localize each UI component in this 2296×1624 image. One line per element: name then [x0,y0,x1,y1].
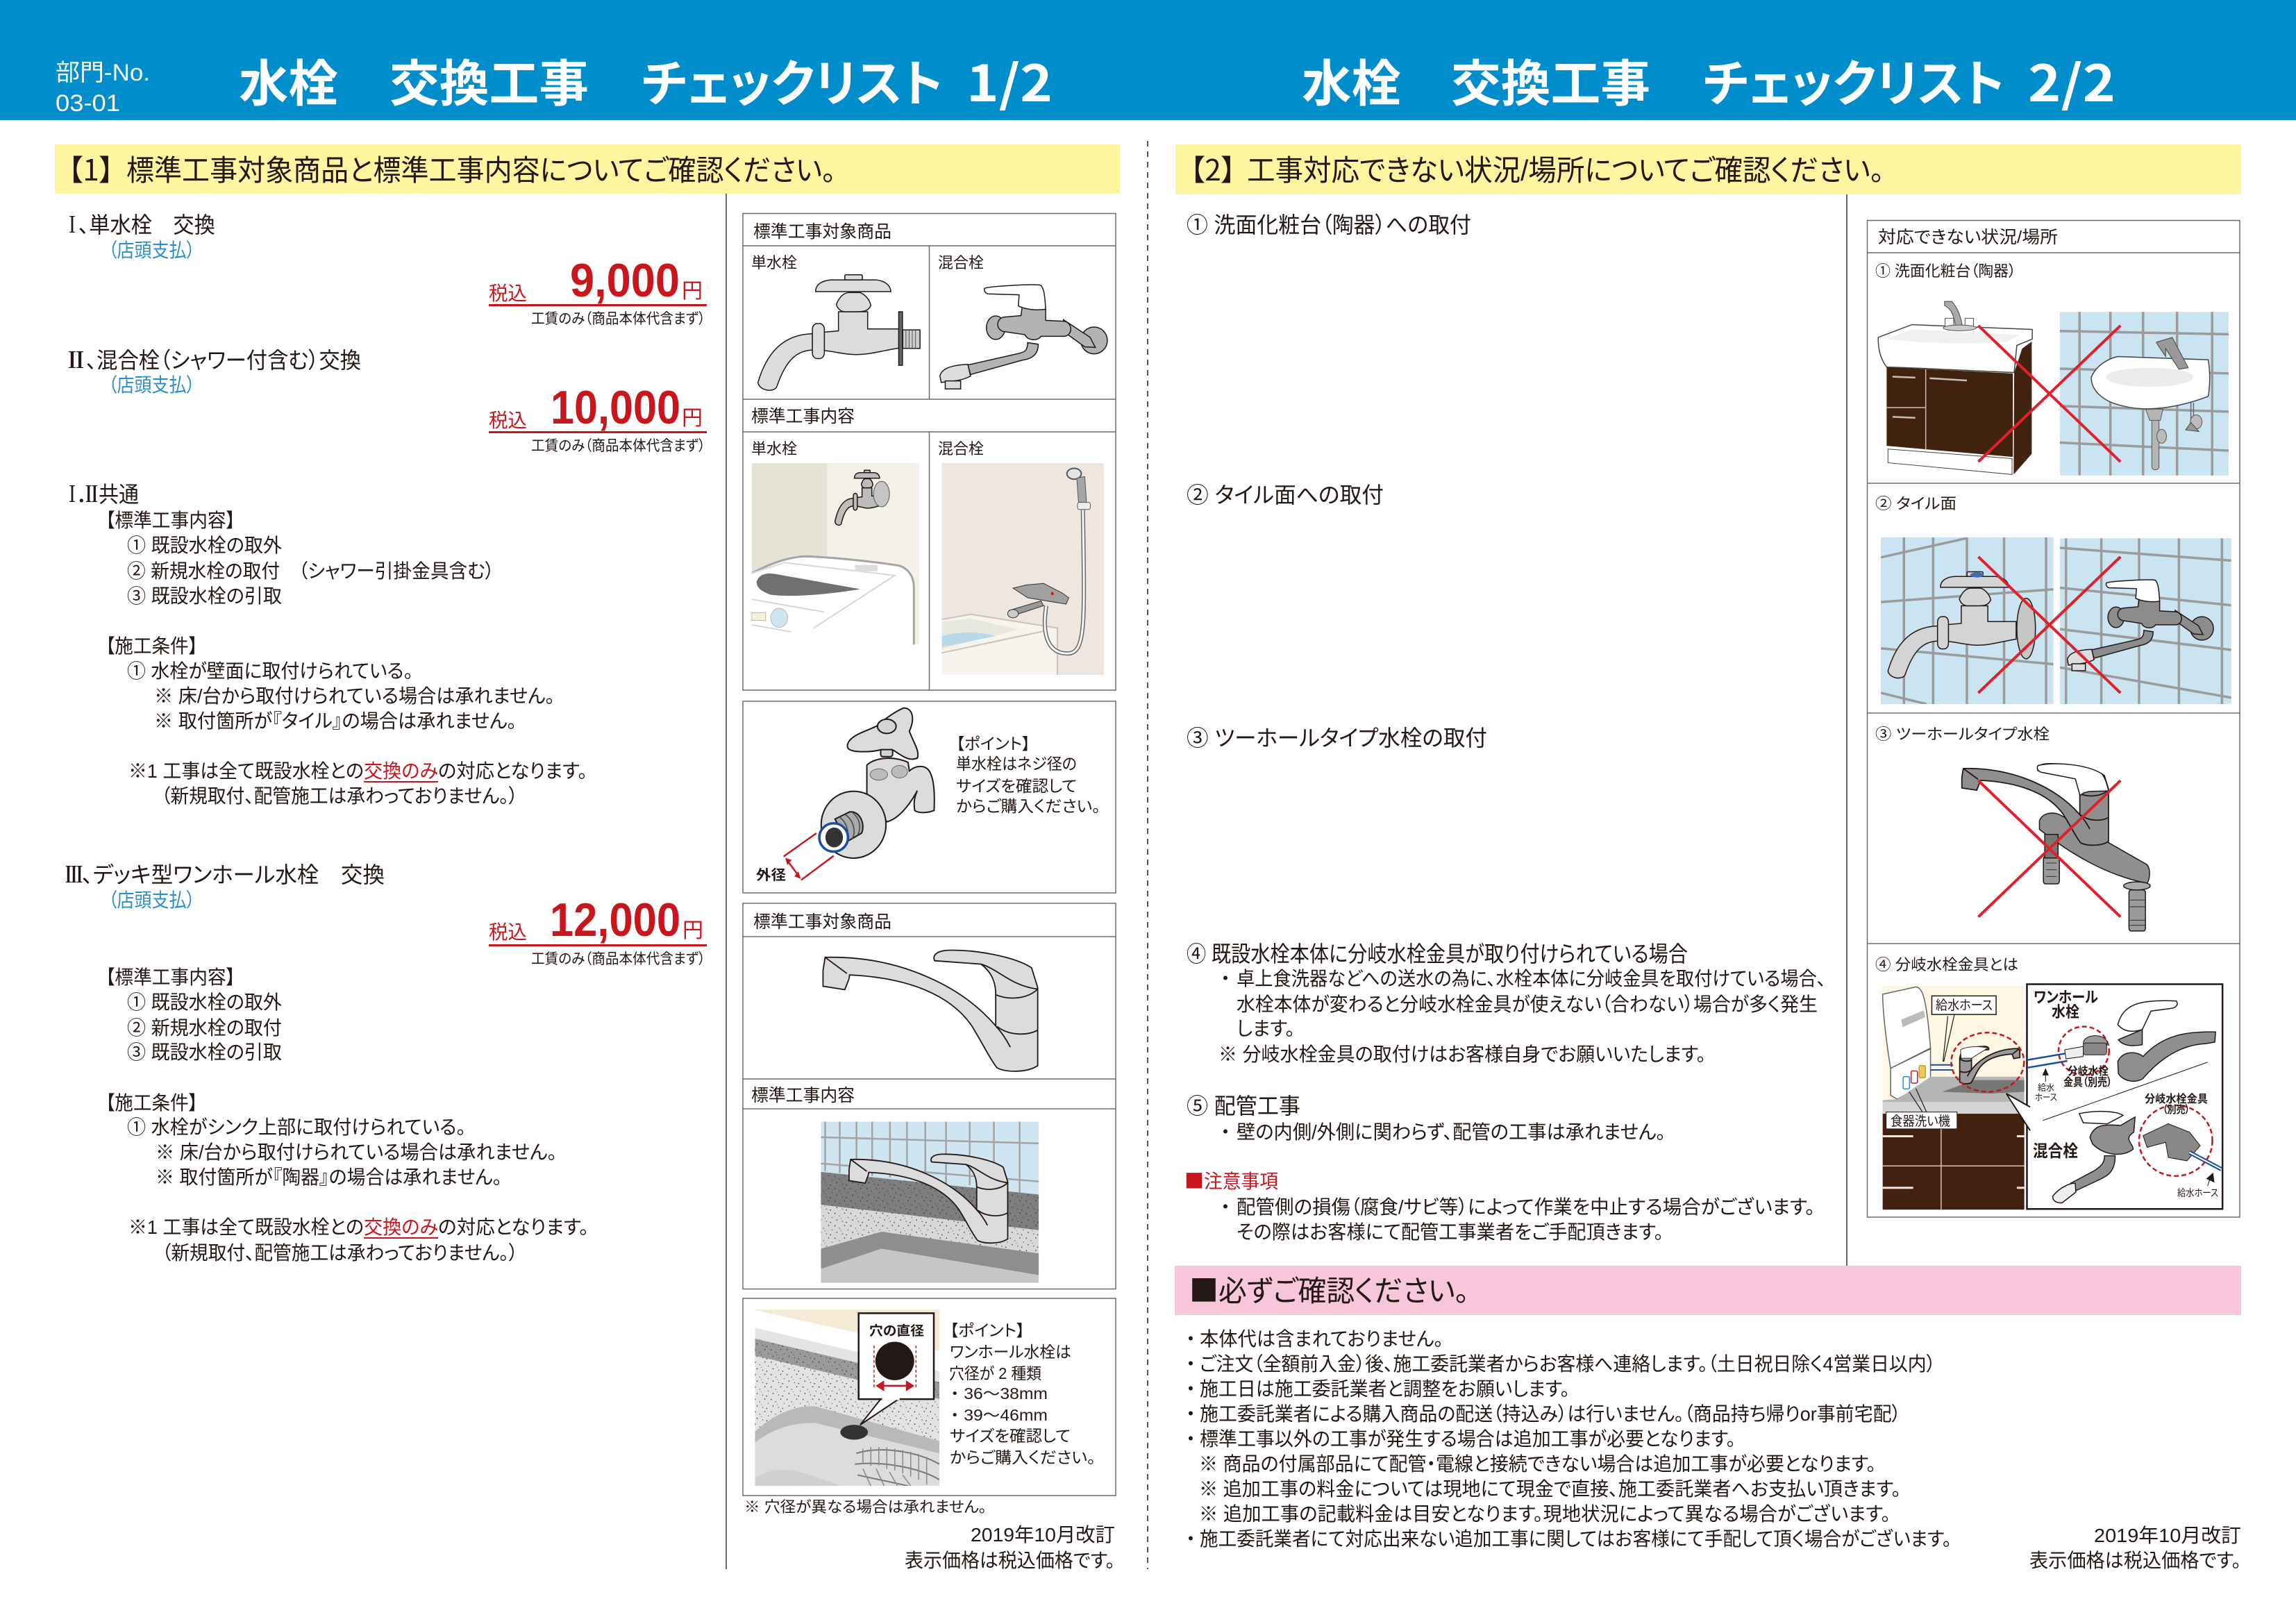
panel: price II mixer faucet: 円 [682,407,703,430]
title: checklist 2/2: チェックリスト [1703,57,2004,112]
point text: 単水栓はネジ径の [956,755,1077,773]
text block: III conditions: ※ 床/台から取付けられている場合は承れません。 [156,1141,557,1163]
panel: target products and work content (single and mixer): 混合栓 [938,254,984,271]
point text: ・ 36～38mm [950,1384,1048,1403]
text block: I II common conditions: の対応となります。 [438,760,587,782]
text block: confirmation list: ・ [1186,1428,1196,1450]
panel: situations that cannot be handled: ④ 分岐水栓金具とは [1875,956,2018,973]
section heading: please confirm [1175,1266,2241,1315]
point text: 穴径が 2 種類 [949,1364,1041,1382]
text block: confirmation list: 標準工事以外の工事が発生する場合は追加工事が必要となります。 [1200,1428,1736,1450]
title: checklist 1/2: 水栓 [239,57,338,112]
icon: red cross 1 [1978,326,2120,462]
point text: 【ポイント】 [956,735,1030,753]
department number: 部門-No. [56,60,150,86]
panel: price III deck faucet [65,857,707,967]
point text [956,735,1100,815]
section heading: please confirm: 必ずご確認ください。 [1218,1275,1469,1307]
text block: caution: 注意事項 [1204,1171,1278,1192]
text block: item 4: 水栓本体が変わると分岐水栓金具が使えない（合わない）場合が多く発生 [1237,994,1818,1015]
section heading: please confirm: ■ [1189,1268,1218,1310]
panel: price III deck faucet: 税込 [489,921,527,943]
text block: III conditions: 【施工条件】 [106,1092,198,1114]
text block: item 4: 卓上食洗器などへの送水の為に、水栓本体に分岐金具を取付けている場合、 [1237,968,1826,989]
panel: target products and work content (single and mixer): 単水栓 [751,254,797,271]
panel: deck faucet product and work: 標準工事内容 [751,1086,855,1105]
text block: I II common conditions [65,477,587,807]
panel: price II mixer faucet: 、混合栓（シャワー付含む）交換 [86,348,361,373]
panel: price II mixer faucet: Ⅱ [65,343,87,375]
panel: price I single faucet: 税込 [489,283,527,304]
title: checklist 2/2: 2/2 [2028,43,2115,116]
panel: price III deck faucet: 工賃のみ（商品本体代含まず） [531,951,705,967]
section heading 1: 標準工事対象商品と標準工事内容についてご確認ください。 [126,154,836,187]
panel: price II mixer faucet: （店頭支払） [108,374,195,396]
title: checklist 2/2: 交換工事 [1451,57,1650,112]
title: checklist 1/2: 1/2 [966,43,1053,116]
panel: target products and work content (single and mixer): 混合栓 [938,440,984,458]
text block: item 5: ⑤ 配管工事 [1187,1094,1300,1119]
section heading 2 [1175,144,2241,194]
text block: item 4: します。 [1237,1018,1295,1039]
text block: III conditions [106,966,589,1264]
text block: item 4: ・ [1221,968,1230,989]
point text: からご購入ください。 [950,1448,1096,1466]
panel: price I single faucet: Ⅰ [65,208,79,240]
title: checklist 1/2: チェックリスト [642,57,943,112]
text block: confirmation list: ・ [1186,1378,1196,1400]
panel: situations that cannot be handled: ③ ツーホールタイプ水栓 [1875,726,2050,743]
text block: caution: ■ [1184,1166,1204,1194]
panel: price III deck faucet: 円 [682,919,703,942]
section heading 2: 工事対応できない状況/場所についてご確認ください。 [1247,154,1884,187]
label: hole diameter: 穴の直径 [869,1323,924,1339]
text block: I II common conditions: ③ 既設水栓の引取 [127,585,282,607]
point text: ・ 39～46mm [950,1406,1048,1424]
labels: branch fitting diagram: 食器洗い機 [1891,1114,1950,1129]
title: checklist 1/2 [239,43,1053,116]
panel: price III deck faucet: Ⅲ [65,857,83,889]
text block: III conditions: ② 新規水栓の取付 [127,1017,282,1039]
footer note right: 表示価格は税込価格です。 [2029,1550,2241,1571]
icon: single lever tap [758,275,920,390]
panel: point about thread size [743,701,1116,893]
text block: items 1 to 3: ② タイル面への取付 [1187,483,1384,508]
text block: I II common conditions: （新規取付、配管施工は承わっておりません。） [161,785,518,807]
text block: confirmation list: ※ 商品の付属部品にて配管・電線と接続できない場合は追加工事が必要となります。 [1199,1453,1876,1475]
labels: branch fitting diagram: 金具（別売） [2063,1075,2112,1089]
labels: branch fitting diagram: （別売） [2163,1104,2190,1116]
text block: I II common conditions: 【標準工事内容】 [106,510,235,531]
footer note left: 2019年10月改訂 [971,1524,1115,1546]
text block: confirmation list: 本体代は含まれておりません。 [1200,1328,1443,1350]
title: checklist 1/2: 交換工事 [389,57,589,112]
labels: branch fitting diagram: 混合栓 [2033,1142,2078,1161]
text block: III conditions: ① 既設水栓の取外 [127,991,282,1013]
text block: I II common conditions: ① 水栓が壁面に取付けられている。 [127,660,413,682]
panel: price I single faucet: 円 [682,280,703,303]
text block: item 5 [1187,1094,1666,1143]
text block: III conditions: 【標準工事内容】 [106,966,235,988]
panel: hole diameter point [743,1298,1116,1496]
panel: price III deck faucet: （店頭支払） [108,889,195,911]
section heading 1: 【1】 [68,147,114,190]
text block: III conditions: ① 水栓がシンク上部に取付けられている。 [127,1116,466,1138]
labels: branch fitting diagram: 分岐水栓 [2068,1064,2109,1078]
panel: price III deck faucet: 12,000 [550,894,680,946]
labels: branch fitting diagram: ワンホール [2034,989,2098,1006]
text block: items 1 to 3: ③ ツーホールタイプ水栓の取付 [1187,726,1487,751]
icon: red cross 3 [1978,780,2120,917]
illustration: faucets on tile crossed out [1881,537,2231,704]
panel: price II mixer faucet: 10,000 [551,381,680,434]
point text: ワンホール水栓は [950,1343,1071,1361]
text block: I II common conditions: . [78,477,85,509]
point text [949,1321,1096,1466]
text block: I II common conditions: ② 新規水栓の取付 （シャワー引掛金具含む） [127,560,494,582]
icon: red cross 2 [1978,557,2120,693]
panel: situations that cannot be handled: ② タイル面 [1875,495,1956,512]
panel: price II mixer faucet: 工賃のみ（商品本体代含まず） [531,438,705,454]
labels: branch fitting diagram [1891,989,2218,1198]
labels: branch fitting diagram: 給水 [2038,1082,2054,1093]
department number [56,60,150,117]
text block: item 4: ※ 分岐水栓金具の取付けはお客様自身でお願いいたします。 [1218,1044,1706,1065]
text block: confirmation list: 施工日は施工委託業者と調整をお願いします。 [1200,1378,1570,1400]
panel: situations that cannot be handled: ① 洗面化粧台（陶器） [1875,262,2016,280]
footer note right [2029,1525,2241,1571]
point text: 【ポイント】 [950,1321,1025,1339]
text block: confirmation list [1186,1328,1952,1550]
label: outer diameter: 外径 [756,867,786,883]
text block: caution: 配管側の損傷（腐食/サビ等）によって作業を中止する場合がございます。 [1237,1196,1815,1218]
illustration: branch fitting diagram [1883,984,2222,1209]
point text: サイズを確認して [956,777,1077,795]
text block: I II common conditions: ※ 床/台から取付けられている場合は承れません。 [154,685,555,707]
text block: items 1 to 3: ① 洗面化粧台（陶器）への取付 [1187,212,1471,237]
text block: confirmation list: ・ [1186,1328,1196,1350]
labels: branch fitting diagram: 分岐水栓金具 [2145,1092,2208,1105]
illustration: two-hole faucet crossed out [1962,764,2150,931]
text block: item 5: ・ [1221,1121,1230,1143]
text block: confirmation list: ・ [1186,1528,1196,1550]
panel: target products and work content (single and mixer): 標準工事内容 [751,407,855,426]
footer note right: 2019年10月改訂 [2094,1525,2241,1546]
text block: III conditions: ③ 既設水栓の引取 [127,1041,282,1063]
icon: mixer faucet [940,285,1107,389]
text block: confirmation list: ご注文（全額前入金）後、施工委託業者からお客様へ連絡します。（土日祝日除く4営業日以内） [1200,1353,1936,1375]
labels: branch fitting diagram: ホース [2035,1092,2057,1103]
text block: I II common conditions: ① 既設水栓の取外 [127,535,282,556]
text block: confirmation list: 施工委託業者による購入商品の配送（持込み）は行いません。（商品持ち帰りor事前宅配） [1200,1403,1901,1425]
panel: target products and work content (single and mixer): 標準工事対象商品 [753,222,891,242]
text block: items 1 to 3 [1187,212,1487,751]
text block: III conditions: ※ 取付箇所が『陶器』の場合は承れません。 [156,1166,502,1188]
note: hole diameter: ※ 穴径が異なる場合は承れません。 [744,1498,987,1516]
panel: target products and work content (single and mixer): 単水栓 [751,440,797,458]
panel: price II mixer faucet [65,343,707,454]
text block: caution [1184,1166,1815,1243]
text block: I II common conditions: 交換のみ [364,760,438,782]
section heading 1 [55,144,1120,194]
panel: situations that cannot be handled: 対応できない状況/場所 [1878,228,2058,247]
labels: branch fitting diagram: 給水ホース [1936,998,1993,1013]
labels: branch fitting diagram: 給水ホース [2177,1187,2218,1198]
panel: price I single faucet [65,208,707,327]
text block: III conditions: 交換のみ [364,1216,438,1238]
illustration: vanity and basin crossed out [1878,301,2229,476]
point text: からご購入ください。 [956,797,1100,815]
department number: 03-01 [56,90,120,117]
illustration: kitchen with deck faucet [821,1122,1039,1283]
panel: price I single faucet: 、単水栓 交換 [78,212,215,237]
labels: branch fitting diagram: 水栓 [2052,1003,2079,1021]
text block: confirmation list: 施工委託業者にて対応出来ない追加工事に関してはお客様にて手配して頂く場合がございます。 [1200,1528,1952,1550]
text block: III conditions: の対応となります。 [438,1216,589,1238]
text block: item 4: ④ 既設水栓本体に分岐水栓金具が取り付けられている場合 [1187,941,1688,966]
footer note left [905,1524,1115,1571]
section heading 2: 【2】 [1190,147,1236,190]
text block: confirmation list: ※ 追加工事の料金については現地にて現金で直接、施工委託業者へお支払い頂きます。 [1199,1478,1901,1500]
text block: confirmation list: ・ [1186,1403,1196,1425]
panel: deck faucet product and work [743,903,1116,1289]
panel: price I single faucet: （店頭支払） [108,240,195,261]
panel: price II mixer faucet: 税込 [489,410,527,431]
panel: price III deck faucet: 、デッキ型ワンホール水栓 交換 [82,862,385,887]
title: checklist 2/2 [1302,43,2115,116]
text block: I II common conditions: ※1 工事は全て既設水栓との [128,760,364,782]
text block: caution: ・ [1221,1196,1230,1218]
title: checklist 2/2: 水栓 [1302,57,1401,112]
text block: I II common conditions: ※ 取付箇所が『タイル』の場合は承れません。 [154,710,517,732]
text block: item 5: 壁の内側/外側に関わらず、配管の工事は承れません。 [1237,1121,1666,1143]
text block: caution: その際はお客様にて配管工事業者をご手配頂きます。 [1237,1221,1664,1243]
text block: III conditions: ※1 工事は全て既設水栓との [128,1216,364,1238]
panel: target products and work content (single and mixer) [743,214,1116,690]
illustration: laundry tap scene [752,463,919,683]
text block: I II common conditions: Ⅰ [65,477,79,509]
text block: III conditions: （新規取付、配管施工は承わっておりません。） [162,1242,518,1264]
panel: deck faucet product and work: 標準工事対象商品 [753,912,891,932]
illustration: sink hole with callout [755,1309,939,1486]
text block: I II common conditions: 共通 [99,482,139,507]
header band [0,0,2296,120]
panel: price I single faucet: 9,000 [570,254,680,307]
text block: confirmation list: ※ 追加工事の記載料金は目安となります。現地状況によって異なる場合がございます。 [1199,1503,1891,1525]
point text: サイズを確認して [950,1427,1071,1445]
illustration: shower mixer scene [941,463,1104,675]
footer note left: 表示価格は税込価格です。 [905,1550,1115,1571]
panel: price I single faucet: 工賃のみ（商品本体代含まず） [531,311,705,327]
text block: I II common conditions: 【施工条件】 [106,635,198,657]
text block: confirmation list: ・ [1186,1353,1196,1375]
text block: I II common conditions: Ⅱ [83,477,100,509]
text block: item 4 [1187,941,1826,1065]
icon: tap with outer diameter [784,708,935,880]
icon: deck faucet [823,951,1038,1071]
panel: situations that cannot be handled [1868,221,2240,1217]
